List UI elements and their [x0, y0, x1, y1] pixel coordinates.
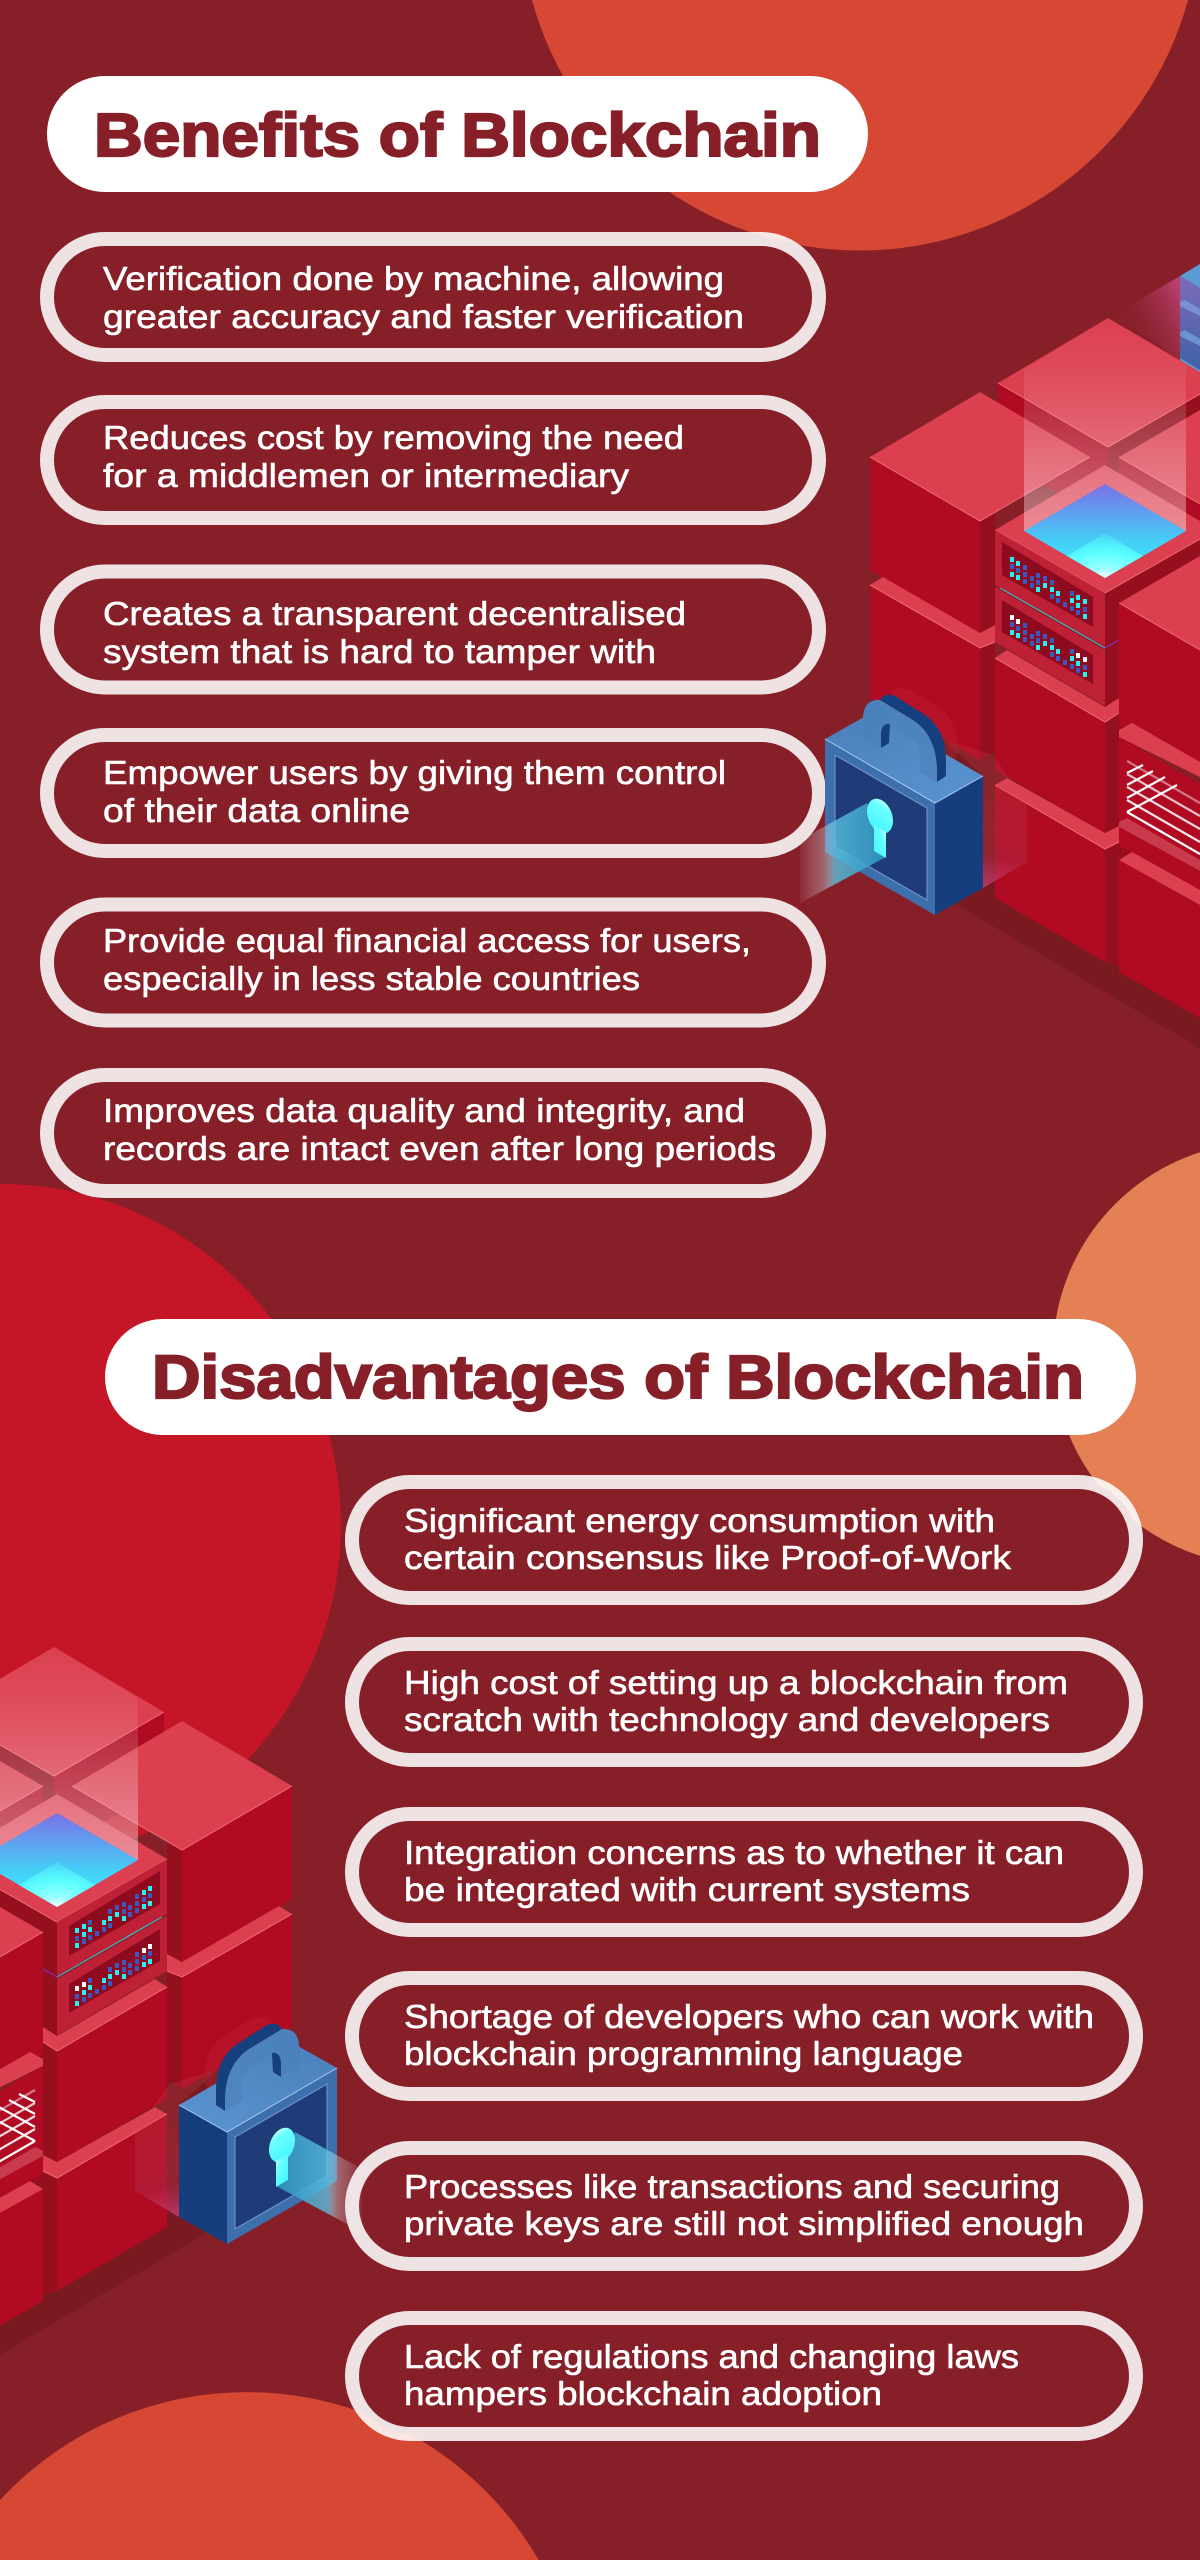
- disadvantage 5: [352, 2148, 1136, 2264]
- disadvantage 3: be integrated with current systems: [404, 1871, 970, 1908]
- glowing screen: [1024, 484, 1186, 578]
- disadvantage 2: [352, 1644, 1136, 1760]
- circle: top orange-red: [532, 0, 1188, 250]
- disadvantage 4: Shortage of developers who can work with: [404, 1998, 1094, 2035]
- title pill: Benefits of Blockchain: Benefits of Blockchain: [94, 101, 821, 169]
- benefit 6: records are intact even after long periods: [103, 1130, 776, 1167]
- LED indicators upper: [1010, 557, 1087, 619]
- benefit 2: for a middlemen or intermediary: [103, 457, 630, 494]
- blue server behind (top right): [1113, 264, 1200, 376]
- circle: right peach: [1053, 1152, 1200, 1556]
- panel divider line: [1000, 588, 1105, 648]
- lower panel: [995, 587, 1105, 706]
- benefit 3: [47, 572, 819, 688]
- benefit 1: greater accuracy and faster verification: [103, 298, 744, 335]
- benefit 3: system that is hard to tamper with: [103, 633, 656, 670]
- benefit 6: [47, 1075, 819, 1191]
- disadvantage 6: [352, 2318, 1136, 2434]
- disadvantage 6: Lack of regulations and changing laws: [404, 2338, 1019, 2375]
- disadvantage 4: blockchain programming language: [404, 2035, 963, 2072]
- benefit 2: Reduces cost by removing the need: [103, 419, 684, 456]
- shackle back: [880, 695, 946, 782]
- disadvantage 3: Integration concerns as to whether it can: [404, 1834, 1064, 1871]
- title pill: Disadvantages of Blockchain: [105, 1319, 1136, 1435]
- benefit 4: Empower users by giving them control: [103, 754, 726, 791]
- server top frame: [995, 465, 1200, 593]
- LED indicators lower: [1010, 615, 1087, 677]
- server unit: [995, 465, 1200, 706]
- padlock: [800, 688, 1027, 915]
- upper panel: [995, 530, 1105, 647]
- benefit 2: [47, 402, 819, 518]
- disadvantages list: [352, 1482, 1136, 2434]
- title pill: Benefits of Blockchain: [47, 76, 868, 192]
- disadvantage 1: [352, 1482, 1136, 1598]
- padlock front face: [825, 739, 935, 915]
- shackle red halo: [892, 688, 958, 770]
- circle: left crimson: [0, 1184, 341, 1866]
- padlock inner panel: [835, 755, 927, 900]
- disadvantage 1: certain consensus like Proof-of-Work: [404, 1539, 1012, 1576]
- circle: bottom orange-red: [0, 2392, 539, 2560]
- left column: [870, 392, 1090, 760]
- illustration: isometric server blocks with padlock (top right): [800, 318, 1200, 1048]
- padlock back glow: [943, 740, 1027, 888]
- screen glow: [1067, 533, 1143, 578]
- right column: [1119, 556, 1200, 1018]
- benefit 1: [47, 239, 819, 355]
- centre column dark side: [1105, 539, 1200, 970]
- disadvantage 3: [352, 1814, 1136, 1930]
- benefit 4: [47, 735, 819, 851]
- benefit 5: Provide equal financial access for users,: [103, 922, 751, 959]
- benefit 3: Creates a transparent decentralised: [103, 595, 686, 632]
- benefit 5: [47, 904, 819, 1020]
- shackle front: [863, 700, 937, 782]
- floor shadow: [940, 700, 1200, 1048]
- benefit 5: especially in less stable countries: [103, 960, 640, 997]
- disadvantage 5: Processes like transactions and securing: [404, 2168, 1060, 2205]
- benefits list: [47, 239, 819, 1191]
- disadvantage 6: hampers blockchain adoption: [404, 2375, 882, 2412]
- light beam above screen: [1024, 318, 1186, 531]
- back right block: [1119, 410, 1200, 560]
- benefit 6: Improves data quality and integrity, and: [103, 1092, 745, 1129]
- padlock right face: [935, 776, 983, 915]
- disadvantage 2: scratch with technology and developers: [404, 1701, 1050, 1738]
- disadvantage 2: High cost of setting up a blockchain from: [404, 1664, 1068, 1701]
- benefit 1: Verification done by machine, allowing: [103, 260, 724, 297]
- centre column lower blocks: [995, 650, 1119, 962]
- keyhole: [862, 795, 898, 858]
- upper back block: [998, 318, 1200, 520]
- keyhole light beam: [800, 803, 886, 903]
- data grid lines: [1127, 761, 1200, 854]
- illustration: isometric server blocks with padlock (bottom left, mirrored): [0, 1647, 362, 2377]
- title pill: Disadvantages of Blockchain: Disadvantages of Blockchain: [152, 1343, 1084, 1411]
- benefit 4: of their data online: [103, 792, 410, 829]
- disadvantage 1: Significant energy consumption with: [404, 1502, 995, 1539]
- padlock top face: [825, 712, 983, 803]
- disadvantage 4: [352, 1978, 1136, 2094]
- disadvantage 5: private keys are still not simplified enough: [404, 2205, 1084, 2242]
